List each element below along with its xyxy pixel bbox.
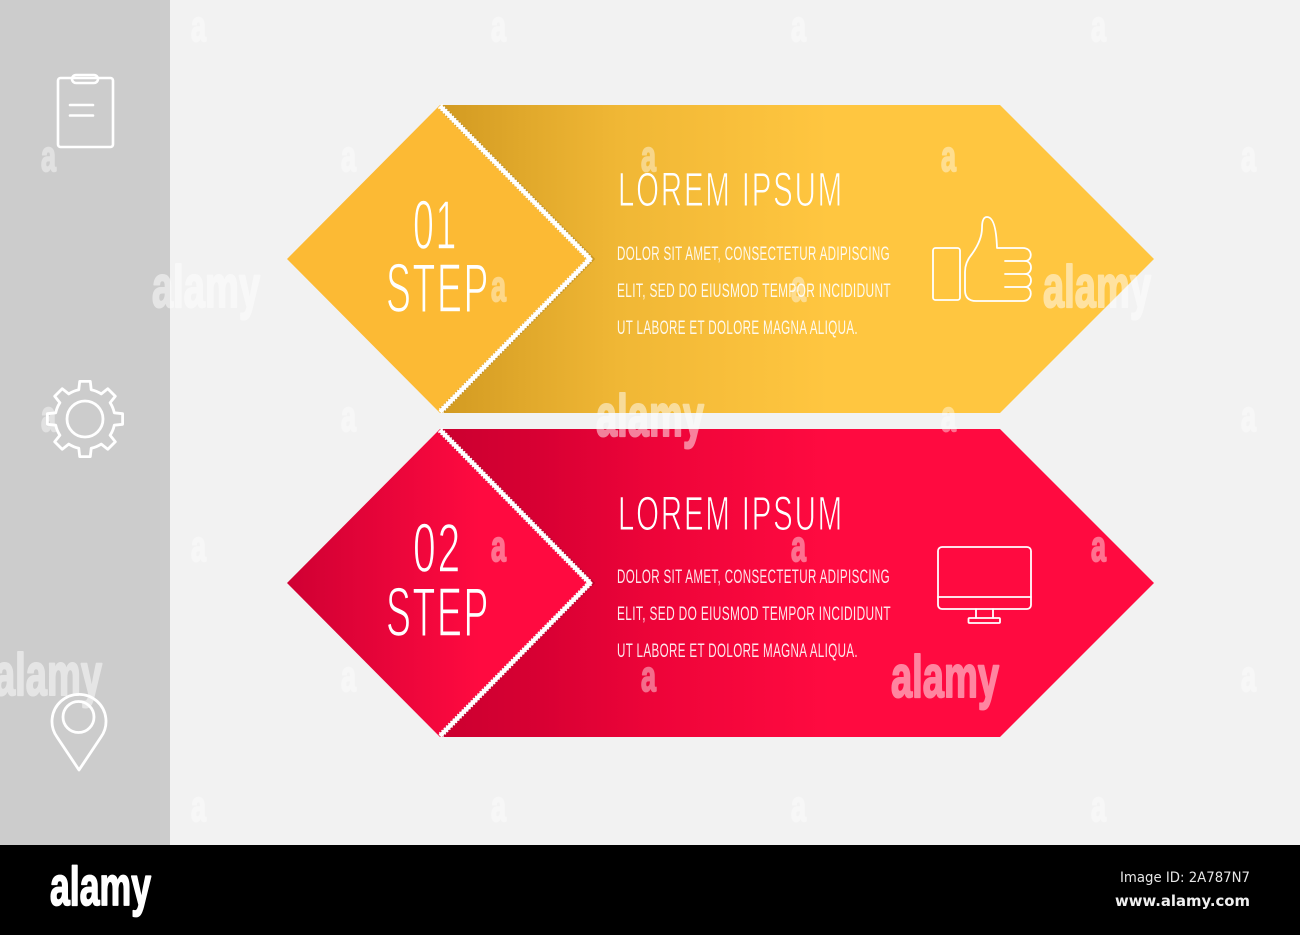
watermark: small repeated marks: a	[641, 652, 656, 701]
watermark: small repeated marks: a	[791, 522, 806, 571]
footer logo: alamy	[50, 855, 151, 917]
watermark: large wordmarks	[0, 254, 1151, 710]
body text: UT LABORE ET DOLORE MAGNA ALIQUA.	[617, 640, 858, 662]
heading: LOREM IPSUM	[618, 164, 844, 217]
watermark: small repeated marks: a	[941, 132, 956, 181]
diamond	[287, 105, 593, 413]
step number: 02	[413, 509, 462, 587]
body text: DOLOR SIT AMET, CONSECTETUR ADIPISCING	[617, 243, 890, 265]
watermark: small repeated marks: a	[191, 2, 206, 51]
watermark: small repeated marks: a	[941, 392, 956, 441]
heading: LOREM IPSUM	[618, 488, 844, 541]
serrated edge	[440, 430, 591, 736]
icon: map pin	[52, 694, 106, 770]
watermark: small repeated marks: a	[341, 652, 356, 701]
watermark: small repeated marks: a	[791, 2, 806, 51]
step number: 01	[413, 186, 458, 264]
watermark: small repeated marks: a	[191, 782, 206, 831]
watermark: small repeated marks: a	[341, 392, 356, 441]
body text: DOLOR SIT AMET, CONSECTETUR ADIPISCING	[617, 566, 890, 588]
watermark: small repeated marks: a	[191, 522, 206, 571]
watermark: large wordmarks: alamy	[891, 644, 999, 710]
step number: STEP	[386, 249, 490, 327]
body text	[617, 243, 891, 339]
step number	[386, 509, 490, 651]
website: www.alamy.com	[1115, 892, 1250, 910]
watermark: small repeated marks: a	[341, 132, 356, 181]
step number	[386, 186, 490, 327]
banner body	[440, 105, 1154, 413]
body text: ELIT, SED DO EIUSMOD TEMPOR INCIDIDUNT	[617, 603, 891, 625]
watermark: small repeated marks: a	[1091, 2, 1106, 51]
watermark: small repeated marks: a	[491, 2, 506, 51]
banner body	[440, 429, 1154, 737]
diamond	[287, 429, 593, 737]
panel: left sidebar	[0, 0, 170, 845]
watermark: small repeated marks: a	[1241, 132, 1256, 181]
body text	[617, 566, 891, 662]
watermark: large wordmarks: alamy	[596, 383, 704, 449]
footer bar	[0, 845, 1300, 935]
body text: UT LABORE ET DOLORE MAGNA ALIQUA.	[617, 317, 858, 339]
watermark: small repeated marks: a	[1091, 522, 1106, 571]
serrated edge	[440, 106, 591, 412]
watermark: small repeated marks: a	[491, 262, 506, 311]
icon: clipboard	[58, 75, 113, 147]
watermark: small repeated marks: a	[1241, 392, 1256, 441]
watermark: small repeated marks: a	[41, 132, 56, 181]
watermark: small repeated marks: a	[1091, 782, 1106, 831]
icon: desktop monitor	[938, 547, 1031, 623]
watermark: small repeated marks: a	[491, 522, 506, 571]
panel: step 02 banner	[287, 429, 1154, 737]
watermark: small repeated marks: a	[41, 392, 56, 441]
watermark: large wordmarks: alamy	[152, 254, 260, 320]
step number: STEP	[386, 573, 490, 651]
panel: step 01 banner	[287, 105, 1154, 413]
watermark: small repeated marks: a	[641, 132, 656, 181]
watermark: small repeated marks: a	[491, 782, 506, 831]
image id: Image ID: 2A787N7	[1120, 870, 1250, 886]
watermark: small repeated marks: a	[791, 782, 806, 831]
watermark: small repeated marks: a	[1241, 652, 1256, 701]
icon: thumbs up	[933, 217, 1031, 301]
icon: gear	[47, 381, 123, 457]
watermark: small repeated marks: a	[791, 262, 806, 311]
body text: ELIT, SED DO EIUSMOD TEMPOR INCIDIDUNT	[617, 280, 891, 302]
watermark: large wordmarks: alamy	[1043, 254, 1151, 320]
